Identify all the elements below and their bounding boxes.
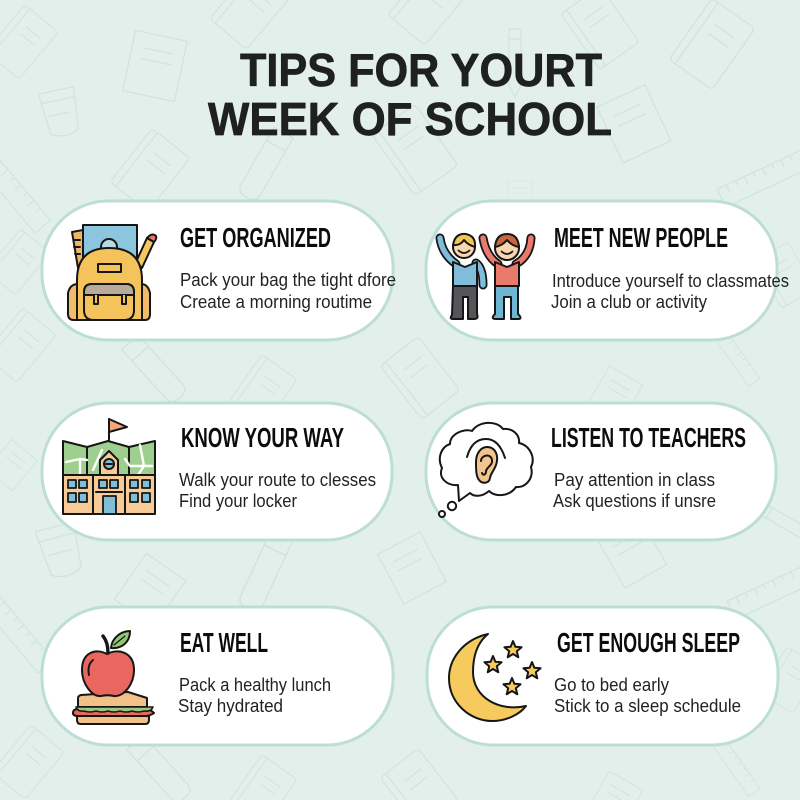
text block: Find your locker xyxy=(179,491,297,511)
card background xyxy=(42,403,392,540)
icon: two waving friends xyxy=(440,234,531,319)
panel: meet new people xyxy=(426,201,789,340)
card background xyxy=(426,201,777,340)
panel: get enough sleep xyxy=(427,607,778,745)
text block: Go to bed early xyxy=(554,675,669,695)
card background xyxy=(42,201,393,340)
title: TIPS FOR YOURT xyxy=(240,44,602,96)
text block: Create a morning routime xyxy=(180,292,372,312)
panel: listen to teachers xyxy=(426,403,776,540)
panel: know your way xyxy=(42,403,392,540)
panel: eat well xyxy=(42,607,393,745)
icon: backpack xyxy=(68,225,156,320)
panel: get organized xyxy=(42,201,396,340)
card background xyxy=(42,607,393,745)
text block xyxy=(179,470,376,511)
icon: moon and stars xyxy=(449,634,541,721)
icon: thought bubble with ear xyxy=(439,423,533,517)
text block: Join a club or activity xyxy=(551,292,707,312)
text block: Stay hydrated xyxy=(178,696,283,716)
icon: apple on sandwich xyxy=(73,631,154,724)
text block xyxy=(178,675,331,716)
text block: Walk your route to clesses xyxy=(179,470,376,490)
text block: Stick to a sleep schedule xyxy=(554,696,741,716)
text block xyxy=(553,470,716,511)
title xyxy=(208,44,612,145)
heading: GET ORGANIZED xyxy=(180,222,331,253)
text block: Ask questions if unsre xyxy=(553,491,716,511)
text block: Pay attention in class xyxy=(554,470,715,490)
text block xyxy=(180,270,396,312)
title: WEEK OF SCHOOL xyxy=(208,93,612,145)
text block: Pack a healthy lunch xyxy=(179,675,331,695)
heading: EAT WELL xyxy=(180,627,268,658)
text block: Pack your bag the tight dfore xyxy=(180,270,396,290)
icon: school with map xyxy=(63,419,155,514)
text block xyxy=(554,675,741,716)
text block xyxy=(551,271,789,312)
card background xyxy=(426,403,776,540)
heading: KNOW YOUR WAY xyxy=(181,422,344,453)
card background xyxy=(427,607,778,745)
